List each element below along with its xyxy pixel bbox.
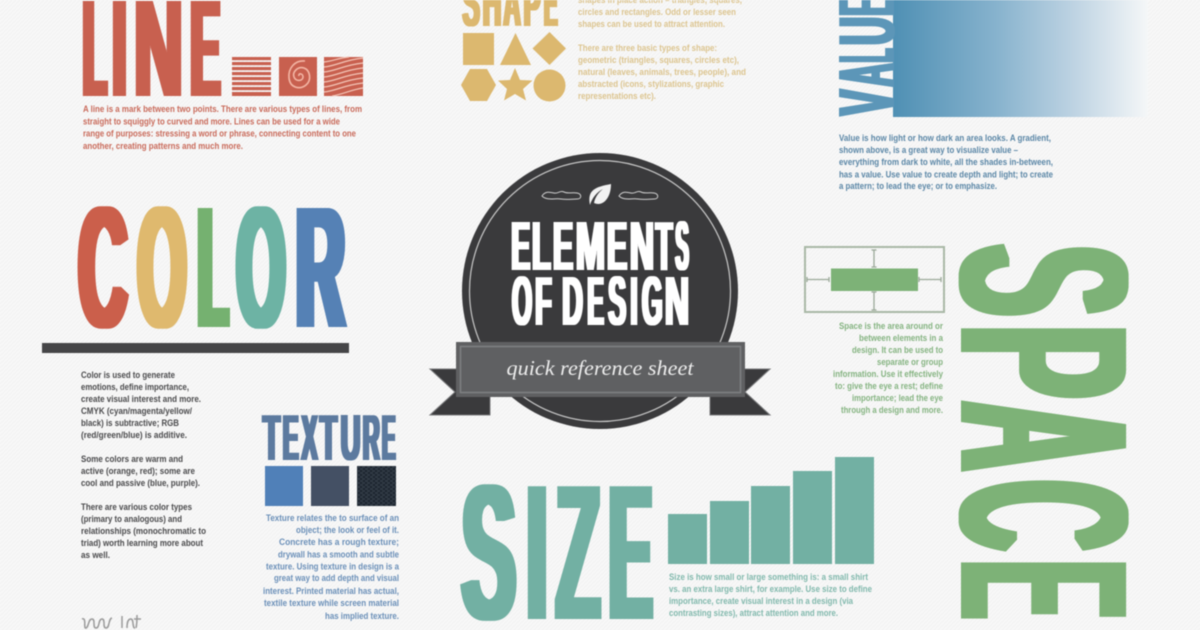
heading: color: C xyxy=(79,170,127,364)
heading: value: L xyxy=(822,49,911,62)
text: space description: to: give the eye a rest; define xyxy=(835,381,943,391)
title: E xyxy=(587,262,604,340)
text: texture description: Concrete has a rough texture; xyxy=(279,537,399,547)
heading: color: O xyxy=(237,170,285,364)
title: G xyxy=(642,262,662,340)
text: color description: relationships (monochromatic to xyxy=(81,526,207,536)
title: M xyxy=(576,207,605,285)
text: size description xyxy=(669,572,872,618)
ornament: left flourish xyxy=(542,191,581,199)
text: color description: create visual interest and more. xyxy=(81,394,201,404)
diagram: space around box xyxy=(805,247,944,312)
icon: leaf xyxy=(589,184,611,205)
panel: value xyxy=(822,0,1148,191)
text: size description: contrasting sizes), attract attention and more. xyxy=(669,608,838,618)
text: space description: through a design and more. xyxy=(841,405,943,415)
text: color description: cool and passive (blue, purple). xyxy=(81,478,200,488)
heading: texture: T xyxy=(263,401,280,474)
ribbon tails xyxy=(430,369,770,415)
title: E xyxy=(607,207,627,285)
heading: space: P xyxy=(910,325,1178,398)
text: shape description: geometric (triangles, squares, circles etc), xyxy=(578,55,739,65)
heading: texture: T xyxy=(320,401,337,474)
heading: value: V xyxy=(822,90,911,116)
text: shape description: representations etc). xyxy=(578,91,656,101)
heading: color: O xyxy=(138,170,186,364)
title xyxy=(511,207,689,340)
text: size description: Size is how small or large something is: a small shirt xyxy=(669,572,868,582)
badge ring xyxy=(470,160,730,422)
heading: value: A xyxy=(822,63,911,86)
text: value description xyxy=(839,133,1053,191)
text: line description: another, creating patterns and much more. xyxy=(83,141,243,151)
title: F xyxy=(535,262,552,340)
ribbon band xyxy=(456,342,745,397)
heading: space: A xyxy=(910,402,1178,470)
text: color description: black) is subtractive; RGB xyxy=(81,418,179,428)
panel: texture xyxy=(263,401,399,621)
text: texture description: textile texture while screen material xyxy=(264,598,399,608)
text: line description: range of purposes: stressing a word or phrase, connecting content to one xyxy=(83,128,356,138)
icon: wavy lines xyxy=(324,57,363,96)
logo mark xyxy=(82,615,141,628)
text: color description: Color is used to generate xyxy=(81,370,175,380)
text: space description xyxy=(833,321,944,415)
icons: six shapes xyxy=(461,32,566,102)
central badge xyxy=(430,153,770,429)
heading: texture: U xyxy=(341,401,360,474)
panel: color xyxy=(42,170,349,560)
central badge: N xyxy=(665,262,689,340)
title: O xyxy=(512,262,532,340)
text: size description: importance, create visual interest in a design (via xyxy=(669,596,853,606)
text: R xyxy=(296,170,345,364)
heading: color: L xyxy=(198,170,228,364)
text: space description: between elements in a xyxy=(859,333,943,343)
text: line description: A line is a mark between two points. There are various types of lines, from xyxy=(83,104,362,114)
text: color description: active (orange, red); some are xyxy=(81,466,195,476)
text: texture description: drywall has a smooth and subtle xyxy=(278,550,399,560)
central badge: S xyxy=(676,207,689,285)
panel: line xyxy=(83,0,363,151)
title: I xyxy=(630,262,638,340)
text: shape description: natural (leaves, animals, trees, people), and xyxy=(578,67,746,77)
dark rule xyxy=(42,343,349,353)
text: shape description: abstracted (icons, stylizations, graphic xyxy=(578,79,724,89)
swatches: three textures xyxy=(265,466,396,506)
panel: size xyxy=(462,444,874,630)
text: space description: information. Use it effectively xyxy=(833,369,943,379)
text: texture description: texture. Using texture in design is a xyxy=(266,562,399,572)
ornament: right flourish xyxy=(619,191,658,199)
icon: straight lines xyxy=(232,57,271,96)
text: texture description: interest. Printed material has actual, xyxy=(263,586,399,596)
text: E xyxy=(382,401,395,474)
ribbon text: quick reference sheet xyxy=(506,356,695,380)
text: color description: (red/green/blue) is additive. xyxy=(81,430,187,440)
text: color description: emotions, define importance, xyxy=(81,382,189,392)
text: color description: triad) worth learning more about xyxy=(81,538,203,548)
text: texture description: has implied texture. xyxy=(325,611,399,621)
text: texture description xyxy=(263,513,399,621)
text: space description: importance; lead the eye xyxy=(852,393,943,403)
text: value description: a pattern; to lead the eye; or to emphasize. xyxy=(839,181,997,191)
text: texture description: Texture relates the to surface of an xyxy=(266,513,399,523)
text: value description: has a value. Use value to create depth and light; to create xyxy=(839,170,1053,180)
text: space description: design. It can be used to xyxy=(852,345,944,355)
title: L xyxy=(532,207,551,285)
text: color description: CMYK (cyan/magenta/yellow/ xyxy=(81,406,192,416)
text: space description: Space is the area around or xyxy=(839,321,944,331)
text: value description: everything from dark to white, all the shades in-between, xyxy=(839,157,1053,167)
bar chart xyxy=(668,457,874,564)
text: space description: separate or group xyxy=(877,357,944,367)
gradient swatch xyxy=(893,0,1148,117)
text: size description: vs. an extra large shirt, for example. Use size to define xyxy=(669,584,872,594)
text: texture description: great way to add depth and visual xyxy=(274,573,399,583)
badge circle xyxy=(462,153,738,429)
text: shape description: circles and rectangles. Odd or lesser seen xyxy=(578,7,736,17)
text: color description: Some colors are warm and xyxy=(81,454,183,464)
text: value description: Value is how light or how dark an area looks. A gradient, xyxy=(839,133,1051,143)
title: D xyxy=(562,262,583,340)
panel: shape xyxy=(461,0,746,102)
text: value description: shown above, is a great way to visualize value – xyxy=(839,145,1018,155)
heading: texture: E xyxy=(283,401,299,474)
text: color description: as well. xyxy=(81,550,110,560)
text: line description: straight to squiggly to curved and more. Lines can be used for a wide xyxy=(83,116,340,126)
text: shape description xyxy=(578,0,746,101)
text: shape description: shapes can be used to attract attention. xyxy=(578,19,725,29)
text: color description: (primary to analogous) and xyxy=(81,514,182,524)
title: S xyxy=(608,262,626,340)
title: N xyxy=(630,207,654,285)
heading: texture: R xyxy=(363,401,380,474)
text: texture description: object; the look or feel of it. xyxy=(296,525,399,535)
text: color description xyxy=(81,370,207,560)
text: color description: There are various color types xyxy=(81,502,192,512)
title: T xyxy=(656,207,672,285)
text: line description xyxy=(83,104,362,151)
title: E xyxy=(511,207,530,285)
icon: spiral xyxy=(279,57,317,96)
heading: space: S xyxy=(910,245,1178,316)
title: E xyxy=(553,207,573,285)
heading: texture: X xyxy=(302,401,318,474)
panel: space xyxy=(805,245,1178,618)
text: shape description: There are three basic types of shape: xyxy=(578,43,717,53)
